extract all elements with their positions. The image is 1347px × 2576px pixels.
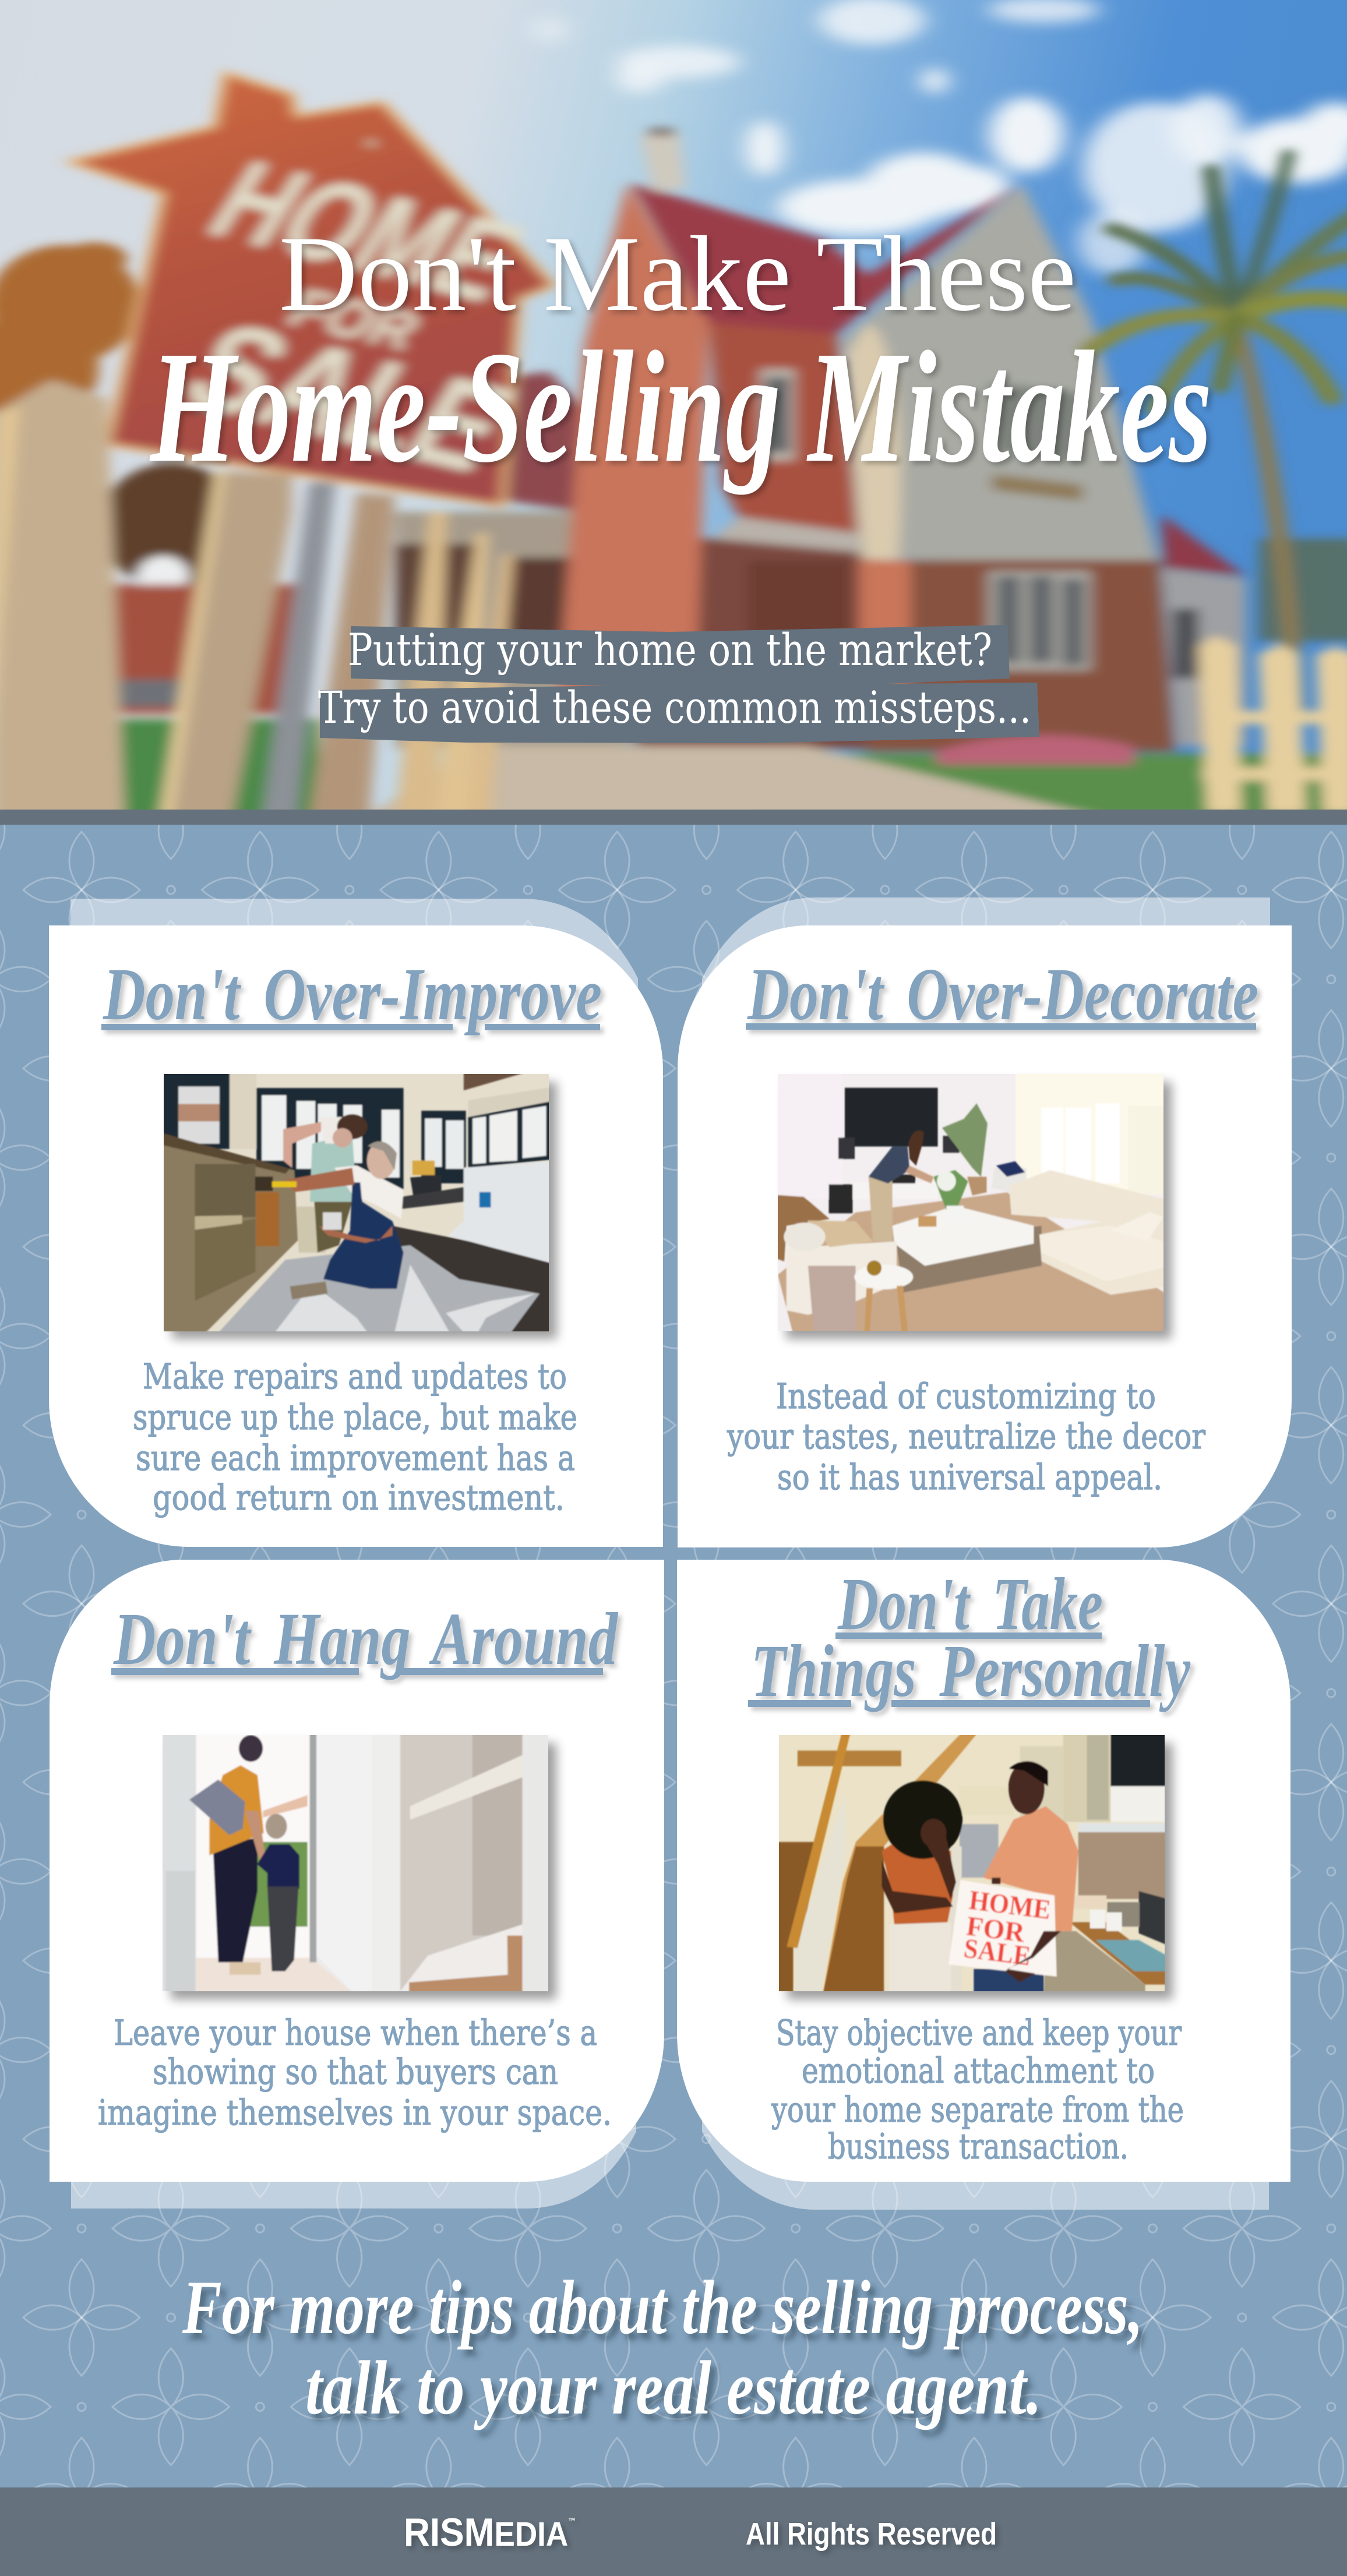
hero photo: blurred house with for-sale sign: FOR: [277, 278, 431, 362]
title line 1: Don't Make These: [279, 214, 1076, 334]
title: [149, 214, 1212, 496]
house: [395, 512, 632, 748]
subtitle text: Putting your home on the market?: [348, 624, 992, 676]
photo: mother and child leaving house: [163, 1735, 548, 1991]
body text: don't take things personally: business transaction.: [828, 2126, 1129, 2167]
palm: [1230, 323, 1304, 711]
for-sale sign: [69, 73, 554, 506]
heading: don't take things personally: Don't Take: [837, 1563, 1103, 1645]
call to action: [182, 2264, 1143, 2430]
body text: don't hang around: [98, 2013, 612, 2133]
panel: don't hang around: [50, 1560, 664, 2208]
background trees: [1258, 539, 1347, 641]
logo: rismedia: ™: [568, 2516, 576, 2525]
panel: patterned blue background: [0, 825, 1347, 2487]
body text: don't over-improve: sure each improvement has a: [136, 1438, 575, 1479]
subtitle text: Try to avoid these common missteps...: [318, 681, 1031, 733]
grass and driveway: [43, 719, 318, 821]
panel: don't take things personally: [677, 1560, 1290, 2210]
body text: don't hang around: showing so that buyers can: [153, 2052, 558, 2093]
body text: don't take things personally: [771, 2013, 1184, 2167]
photo: upset couple holding home for sale sign: HOME: [967, 1885, 1052, 1925]
driveway: [361, 746, 1108, 819]
right fence: [1198, 635, 1347, 813]
call to action: talk to your real estate agent.: [305, 2345, 1042, 2430]
body text: don't take things personally: emotional attachment to: [802, 2051, 1155, 2091]
heading: don't take things personally: [748, 1563, 1191, 1712]
body text: don't take things personally: your home separate from the: [771, 2090, 1184, 2130]
hero photo: blurred house with for-sale sign: SALE: [161, 296, 537, 497]
photo shadow: [786, 1082, 1172, 1339]
photo: woman arranging flowers in living room: [778, 1074, 1163, 1331]
sign pole and fence pickets: [262, 482, 335, 819]
hero photo: blurred house with for-sale sign: HOME: [188, 136, 546, 325]
photo: upset couple holding home for sale sign: [779, 1735, 1165, 1991]
photo shadow: [787, 1743, 1173, 1999]
body text: don't over-improve: [133, 1356, 577, 1518]
heading: don't over-improve: Don't Over-Improve: [103, 953, 602, 1036]
subtitle banner: [318, 624, 1039, 743]
logo: rismedia: RISMEDIA: [404, 2510, 575, 2554]
heading: don't take things personally: Things Personally: [751, 1630, 1191, 1712]
band under hero: [0, 810, 1347, 825]
body text: don't over-improve: good return on investment.: [153, 1478, 565, 1518]
body text: don't over-improve: spruce up the place, but make: [133, 1397, 577, 1438]
photo: upset couple holding home for sale sign: FOR: [965, 1910, 1027, 1949]
photo shadow: [171, 1743, 556, 1999]
body text: don't take things personally: Stay objective and keep your: [776, 2013, 1182, 2054]
footer bar: [0, 2487, 1347, 2576]
panel: don't over-decorate: [678, 897, 1292, 1547]
body text: don't over-decorate: Instead of customizing to: [776, 1376, 1156, 1417]
photo shadow: [172, 1082, 557, 1339]
footer: logo and rights: [404, 2510, 997, 2554]
body text: don't over-decorate: your tastes, neutralize the decor: [727, 1416, 1205, 1457]
body text: don't over-decorate: so it has universal appeal.: [777, 1457, 1162, 1498]
rights text: All Rights Reserved: [746, 2517, 997, 2552]
body text: don't over-decorate: [727, 1376, 1205, 1498]
photo: couple repairing cabinet: [164, 1074, 549, 1331]
subtitle text: [318, 624, 1031, 733]
body text: don't hang around: Leave your house when there’s a: [114, 2013, 597, 2054]
photo: upset couple holding home for sale sign: SALE: [962, 1933, 1032, 1972]
body text: don't hang around: imagine themselves in your space.: [98, 2093, 612, 2133]
heading: don't hang around: Don't Hang Around: [113, 1598, 619, 1680]
body text: don't over-improve: Make repairs and updates to: [143, 1356, 567, 1397]
panel: don't over-improve: [49, 899, 663, 1547]
